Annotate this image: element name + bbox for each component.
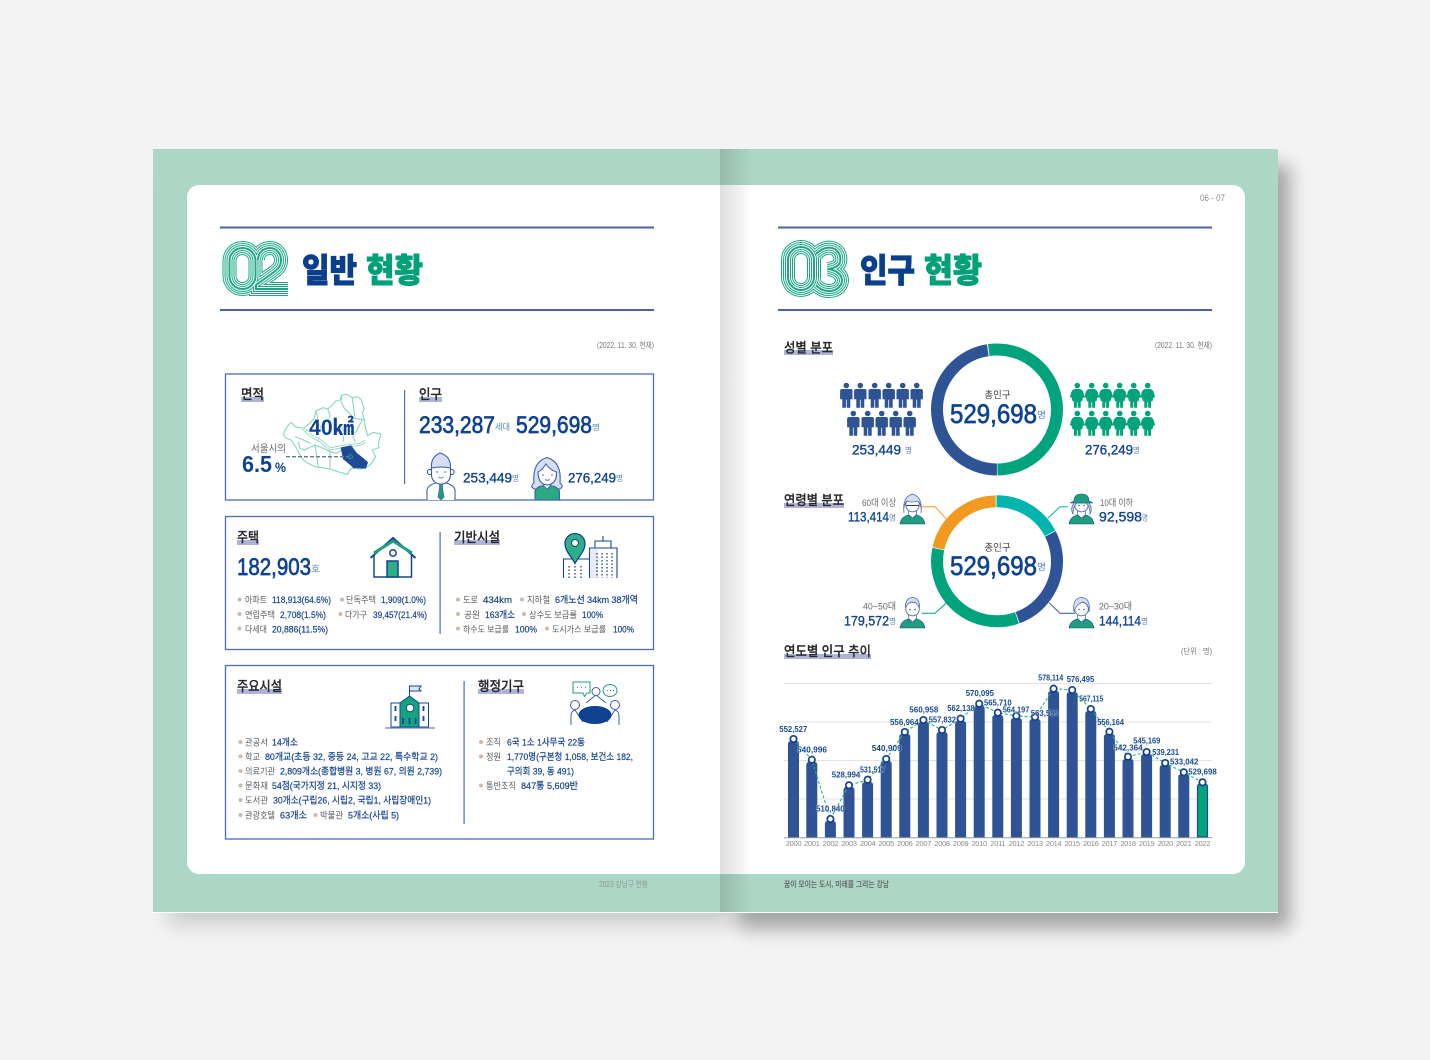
female count: 276,249	[568, 470, 616, 486]
value labels: 562,138	[947, 703, 975, 713]
group: 60 and over: 명	[889, 512, 896, 522]
markers	[790, 686, 1206, 822]
donut: age	[937, 501, 1057, 621]
infrastructure list: 163개소	[485, 610, 515, 621]
Gangnam district	[341, 446, 368, 468]
group: 20 to 30s: 명	[1141, 616, 1148, 626]
year labels: 2011	[990, 839, 1005, 848]
trend line	[794, 689, 1202, 819]
households unit: 세대	[495, 422, 510, 432]
icon: city and pin	[564, 534, 617, 578]
white content sheet	[187, 185, 1245, 874]
facilities list: 학교	[245, 752, 260, 762]
housing list: 39,457(21.4%)	[373, 610, 427, 621]
infrastructure list: 100%	[613, 624, 634, 636]
housing list	[238, 595, 427, 636]
group: 40 to 50s: 명	[889, 616, 896, 626]
group: 40 to 50s	[844, 598, 925, 628]
infrastructure list: 도로	[463, 595, 478, 605]
section title: 인구	[860, 252, 915, 289]
infrastructure list: 434km	[483, 595, 512, 606]
divider	[464, 681, 465, 824]
value labels: 529,698	[1188, 766, 1217, 776]
heading: administration: 행정기구	[478, 679, 524, 694]
group: 10s and under: 92,598	[1099, 509, 1142, 525]
housing list: 2,708(1.5%)	[280, 610, 326, 621]
facilities list: 2,809개소(종합병원 3, 병원 67, 의원 2,739)	[280, 766, 442, 778]
male unit: 명	[905, 445, 912, 455]
administration list: 정원	[486, 752, 501, 762]
axis	[784, 837, 1212, 839]
administration list: 통반조직	[486, 781, 516, 791]
section title: 현황	[366, 252, 423, 289]
share label: 서울시의	[251, 443, 286, 455]
value labels: 557,832	[929, 715, 956, 725]
connectors	[922, 507, 1075, 613]
year labels: 2012	[1009, 839, 1024, 848]
book fold shadow	[720, 149, 752, 912]
year labels: 2014	[1046, 839, 1061, 848]
male unit: 명	[512, 473, 519, 483]
value labels: 564,197	[1003, 705, 1030, 715]
housing unit: 호	[311, 564, 320, 574]
group: 60 and over: 60대 이상	[862, 498, 896, 509]
year labels: 2005	[878, 839, 894, 848]
infrastructure list: 도시가스 보급률	[552, 624, 606, 634]
group: 20 to 30s	[1069, 598, 1148, 628]
year labels: 2022	[1195, 839, 1210, 848]
housing list: 연립주택	[245, 610, 275, 620]
administration list: 847통 5,609반	[521, 781, 578, 792]
heading: gender: 성별 분포	[784, 340, 833, 356]
households: 233,287	[419, 412, 495, 439]
group: 40 to 50s: 179,572	[844, 612, 889, 628]
yearly population chart	[779, 644, 1217, 848]
year labels: 2007	[916, 839, 931, 848]
infrastructure list: 상수도 보급률	[529, 610, 577, 620]
divider	[440, 532, 441, 634]
value labels: 540,909	[872, 743, 902, 753]
infrastructure list: 100%	[582, 610, 603, 621]
group: 20 to 30s: 20~30대	[1099, 602, 1132, 612]
value labels: 533,042	[1170, 757, 1199, 767]
value labels: 570,095	[966, 688, 994, 698]
facilities list: 30개소(구립26, 시립2, 국립1, 사립장애인1)	[273, 794, 431, 806]
page number: 06 - 07	[1200, 193, 1225, 204]
group: 10s and under: 명	[1142, 512, 1148, 522]
heading: infrastructure: 기반시설	[454, 530, 500, 545]
donut center value: 529,698	[950, 399, 1037, 429]
value labels: 531,517	[860, 765, 886, 775]
administration list: 구의회 39, 동 491)	[507, 766, 574, 778]
section title: 일반	[302, 252, 357, 289]
year labels: 2019	[1139, 839, 1154, 848]
male pictograms	[840, 383, 923, 436]
year labels: 2002	[823, 839, 838, 848]
left page section header	[220, 226, 654, 311]
facilities list: 관공서	[245, 738, 268, 748]
year labels: 2000	[786, 839, 801, 848]
population unit: 명	[592, 422, 600, 432]
year labels: 2003	[841, 839, 857, 848]
value labels: 565,710	[984, 698, 1012, 708]
heading: housing: 주택	[237, 530, 259, 545]
group: 20 to 30s: 144,114	[1099, 612, 1141, 628]
administration list: 조직	[486, 738, 501, 748]
housing total: 182,903	[237, 554, 311, 581]
year labels: 2016	[1083, 839, 1099, 848]
infrastructure list: 지하철	[527, 595, 550, 605]
total population: 529,698	[516, 412, 592, 439]
administration list: 1,770명(구본청 1,058, 보건소 182,	[507, 752, 633, 763]
dashed leader	[286, 456, 350, 458]
housing list: 다세대	[245, 624, 267, 634]
footer left: 2023 강남구 현황	[599, 879, 649, 889]
donut center label: 총인구	[984, 390, 1010, 402]
housing list: 20,886(11.5%)	[272, 624, 328, 636]
icon: woman	[532, 458, 562, 500]
left page shadow	[168, 175, 733, 925]
facilities list: 54점(국가지정 21, 시지정 33)	[272, 780, 381, 792]
donut: gender	[937, 350, 1057, 470]
value labels: 563,599	[1031, 708, 1059, 718]
facilities list: 5개소(사립 5)	[348, 810, 399, 822]
facilities list: 63개소	[280, 810, 307, 822]
female total: 276,249	[1085, 442, 1133, 458]
icon: meeting	[570, 682, 620, 725]
infrastructure list	[456, 595, 638, 636]
heading: population: 인구	[419, 387, 442, 402]
housing list: 118,913(64.6%)	[272, 595, 331, 606]
facilities list: 14개소	[272, 738, 298, 748]
group: 60 and over	[848, 494, 925, 525]
number 02	[230, 248, 288, 289]
year labels: 2015	[1064, 839, 1080, 848]
value labels: 540,996	[797, 745, 827, 755]
donut center unit: 명	[1037, 562, 1046, 572]
group: 60 and over: 113,414	[848, 509, 889, 525]
female unit: 명	[1133, 445, 1140, 455]
value labels: 576,495	[1067, 674, 1095, 684]
divider	[404, 390, 405, 484]
infrastructure list: 100%	[515, 624, 537, 636]
value labels: 542,364	[1113, 743, 1143, 753]
value labels: 567,115	[1079, 694, 1104, 704]
facilities list: 80개교(초등 32, 중등 24, 고교 22, 특수학교 2)	[265, 752, 438, 763]
donut center label: 총인구	[984, 542, 1010, 554]
area value: 40㎢	[309, 415, 354, 440]
year labels	[786, 839, 1210, 848]
number 03	[788, 247, 842, 291]
value labels: 552,527	[779, 724, 808, 734]
value labels: 539,231	[1152, 747, 1179, 757]
highlighted 2022 bar	[1198, 784, 1208, 837]
donut center unit: 명	[1037, 410, 1046, 420]
heading: area: 면적	[241, 387, 264, 402]
year labels: 2009	[953, 839, 968, 848]
age distribution	[784, 493, 1148, 628]
bars	[788, 691, 1189, 838]
year labels: 2006	[897, 839, 913, 848]
year labels: 2008	[934, 839, 950, 848]
housing list: 다가구	[345, 610, 367, 620]
facilities list: 의료기관	[245, 766, 275, 776]
value labels: 528,994	[832, 770, 861, 780]
infrastructure list: 공원	[464, 610, 480, 620]
donut center value: 529,698	[950, 551, 1037, 581]
heading: facilities: 주요시설	[237, 679, 282, 694]
value labels: 578,114	[1038, 673, 1064, 683]
date note right: (2022. 11. 30. 현재)	[1155, 341, 1212, 350]
group: 10s and under	[1069, 494, 1148, 525]
facilities list	[238, 738, 442, 822]
icon: house	[370, 538, 416, 577]
year labels: 2001	[804, 839, 820, 848]
panel: area and population	[226, 374, 654, 500]
unit note: (단위 : 명)	[1181, 646, 1212, 656]
year labels: 2018	[1120, 839, 1136, 848]
year labels: 2013	[1027, 839, 1043, 848]
infrastructure list: 하수도 보급률	[463, 624, 509, 634]
panel: major facilities and administration	[226, 666, 654, 839]
year labels: 2004	[860, 839, 875, 848]
heading: yearly: 연도별 인구 추이	[784, 644, 871, 659]
female pictograms	[1070, 383, 1155, 436]
group: 40 to 50s: 40~50대	[863, 602, 896, 612]
heading: age: 연령별 분포	[784, 493, 844, 508]
infrastructure list: 6개노선 34km 38개역	[555, 595, 638, 606]
bottom edge highlight	[153, 912, 1278, 913]
section title: 현황	[924, 252, 982, 289]
administration list	[479, 738, 633, 792]
facilities list: 도서관	[245, 796, 268, 806]
gender distribution	[784, 340, 1155, 470]
female unit: 명	[616, 473, 623, 483]
grid lines	[784, 684, 1212, 799]
housing list: 단독주택	[346, 595, 376, 605]
value labels: 556,964	[890, 717, 919, 727]
share value: 6.5	[242, 451, 272, 477]
map of Seoul	[283, 394, 381, 474]
housing list: 아파트	[245, 595, 267, 605]
male count: 253,449	[463, 470, 512, 486]
housing list: 1,909(1.0%)	[381, 595, 426, 606]
green page background	[153, 149, 1278, 912]
year labels: 2010	[971, 839, 987, 848]
value labels	[779, 673, 1217, 814]
year labels: 2017	[1102, 839, 1117, 848]
value labels: 556,164	[1097, 717, 1124, 727]
icon: school	[385, 686, 435, 728]
facilities list: 관광호텔	[245, 810, 275, 820]
footer right: 꿈이 모이는 도시, 미래를 그리는 강남	[784, 879, 890, 889]
right page section header	[778, 226, 1212, 311]
administration list: 6국 1소 1사무국 22동	[507, 738, 585, 748]
male total: 253,449	[852, 442, 901, 458]
date note left: (2022. 11. 30. 현재)	[597, 341, 654, 350]
icon: man	[427, 453, 455, 500]
share value: %	[275, 459, 286, 475]
value labels: 560,958	[909, 705, 939, 715]
year labels: 2021	[1176, 839, 1192, 848]
facilities list: 문화재	[245, 781, 268, 791]
facilities list: 박물관	[320, 810, 343, 820]
right page shadow	[738, 165, 1290, 929]
value labels: 545,169	[1133, 736, 1161, 746]
panel: housing and infrastructure	[226, 516, 654, 650]
year labels: 2020	[1157, 839, 1173, 848]
group: 10s and under: 10대 이하	[1100, 497, 1133, 509]
value labels: 510,840	[816, 804, 845, 814]
